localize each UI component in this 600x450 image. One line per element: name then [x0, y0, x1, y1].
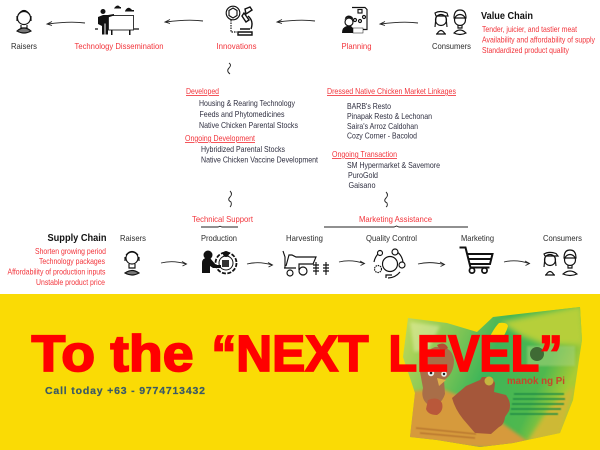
icon: innovations microscope [226, 6, 252, 35]
icon: raiser top [17, 10, 31, 33]
icon: production [202, 250, 236, 274]
text block: developed and ongoing development: Feeds and Phytomedicines [200, 110, 284, 119]
connector: technical support squiggle [229, 191, 232, 207]
arrow: raisers to production [161, 262, 186, 266]
label: raisers: Raisers [11, 41, 37, 51]
text block: supply chain: Unstable product price [36, 277, 105, 287]
arrow: quality control to marketing [418, 262, 444, 266]
text block: developed and ongoing development: Native Chicken Parental Stocks [199, 121, 298, 130]
label: technical support: Technical Support [192, 214, 254, 224]
label: consumers: Consumers [543, 233, 582, 243]
text block: market linkages and ongoing transaction: Cozy Corner - Bacolod [347, 132, 417, 140]
title: LEVEL” [388, 325, 562, 382]
icon: consumers top [435, 10, 466, 34]
arrow: production to harvesting [247, 262, 272, 267]
text block: market linkages and ongoing transaction: Saira's Arroz Caldohan [347, 122, 418, 131]
icon: planning [342, 8, 367, 33]
text block: value chain: Standardized product quality [482, 45, 570, 55]
panel: value chain top row [11, 6, 471, 51]
icon: consumers [544, 250, 577, 276]
heading: developed: Developed [186, 86, 219, 96]
label: harvesting: Harvesting [286, 233, 323, 243]
connector: innovations squiggle [228, 63, 230, 74]
label: production: Production [201, 233, 237, 243]
text block: market linkages and ongoing transaction: BARB's Resto [347, 102, 391, 111]
arrow: harvesting to quality control [339, 261, 364, 266]
text block: market linkages and ongoing transaction: SM Hypermarket & Savemore [347, 161, 440, 170]
panel: supply chain row [120, 233, 582, 278]
title: To the [32, 325, 194, 382]
heading: ongoing transaction: Ongoing Transaction [332, 149, 397, 159]
text block: supply chain: Technology packages [39, 256, 105, 266]
arrow: marketing to consumers [504, 261, 530, 266]
text block: value chain: Tender, juicier, and tastier meat [482, 24, 578, 34]
label: raisers: Raisers [120, 233, 146, 243]
text block: supply chain: Shorten growing period [35, 246, 106, 256]
text block: developed and ongoing development: Hybridized Parental Stocks [201, 145, 285, 154]
heading: ongoing development: Ongoing Development [185, 133, 256, 143]
label: consumers: Consumers [432, 41, 471, 51]
icon: raiser [125, 252, 139, 275]
panel: diagram content [8, 6, 596, 287]
text block: developed and ongoing development [185, 86, 319, 164]
heading: market linkages: Dressed Native Chicken Market Linkages [327, 86, 456, 96]
text block: market linkages and ongoing transaction: Gaisano [348, 181, 376, 190]
icon: cart [460, 248, 492, 273]
bag label text: manok ng Pi [507, 375, 565, 387]
text block: developed and ongoing development: Housing & Rearing Technology [199, 99, 296, 108]
title: “NEXT [212, 325, 368, 382]
text block: developed and ongoing development: Native Chicken Vaccine Development [201, 156, 319, 164]
arrow: planning to innovations [277, 20, 315, 24]
arrow: technology to raisers [47, 22, 85, 26]
text block: supply chain: Affordability of production inputs [8, 266, 106, 276]
text block: market linkages and ongoing transaction: PuroGold [348, 171, 378, 180]
panel: white diagram background [0, 0, 600, 294]
label: quality control: Quality Control [366, 233, 417, 243]
heading: value chain: Value Chain [481, 10, 533, 22]
text block: value chain [481, 10, 596, 55]
title [32, 325, 562, 382]
label: innovations: Innovations [216, 41, 256, 51]
text block: supply chain [8, 232, 106, 287]
panel: yellow banner [0, 294, 600, 450]
text block: market linkages and ongoing transaction: Pinapak Resto & Lechonan [347, 112, 432, 121]
heading: supply chain: Supply Chain [48, 232, 106, 244]
icon: technology dissemination [95, 6, 139, 35]
text block: market linkages and ongoing transaction [327, 86, 456, 190]
icon: quality control [374, 249, 405, 278]
icon: harvesting [283, 251, 329, 276]
connector: marketing squiggle [385, 192, 388, 207]
label: marketing assistance: Marketing Assistance [359, 214, 432, 224]
label: planning: Planning [342, 41, 372, 51]
arrow: consumers to planning [380, 22, 418, 26]
arrow: innovations to technology [165, 20, 203, 24]
label: technology dissemination: Technology Dissemination [74, 41, 164, 51]
call to action: Call today +63 - 9774713432 [45, 385, 205, 397]
label: marketing: Marketing [461, 233, 494, 243]
image: chicken product bag [400, 305, 584, 450]
